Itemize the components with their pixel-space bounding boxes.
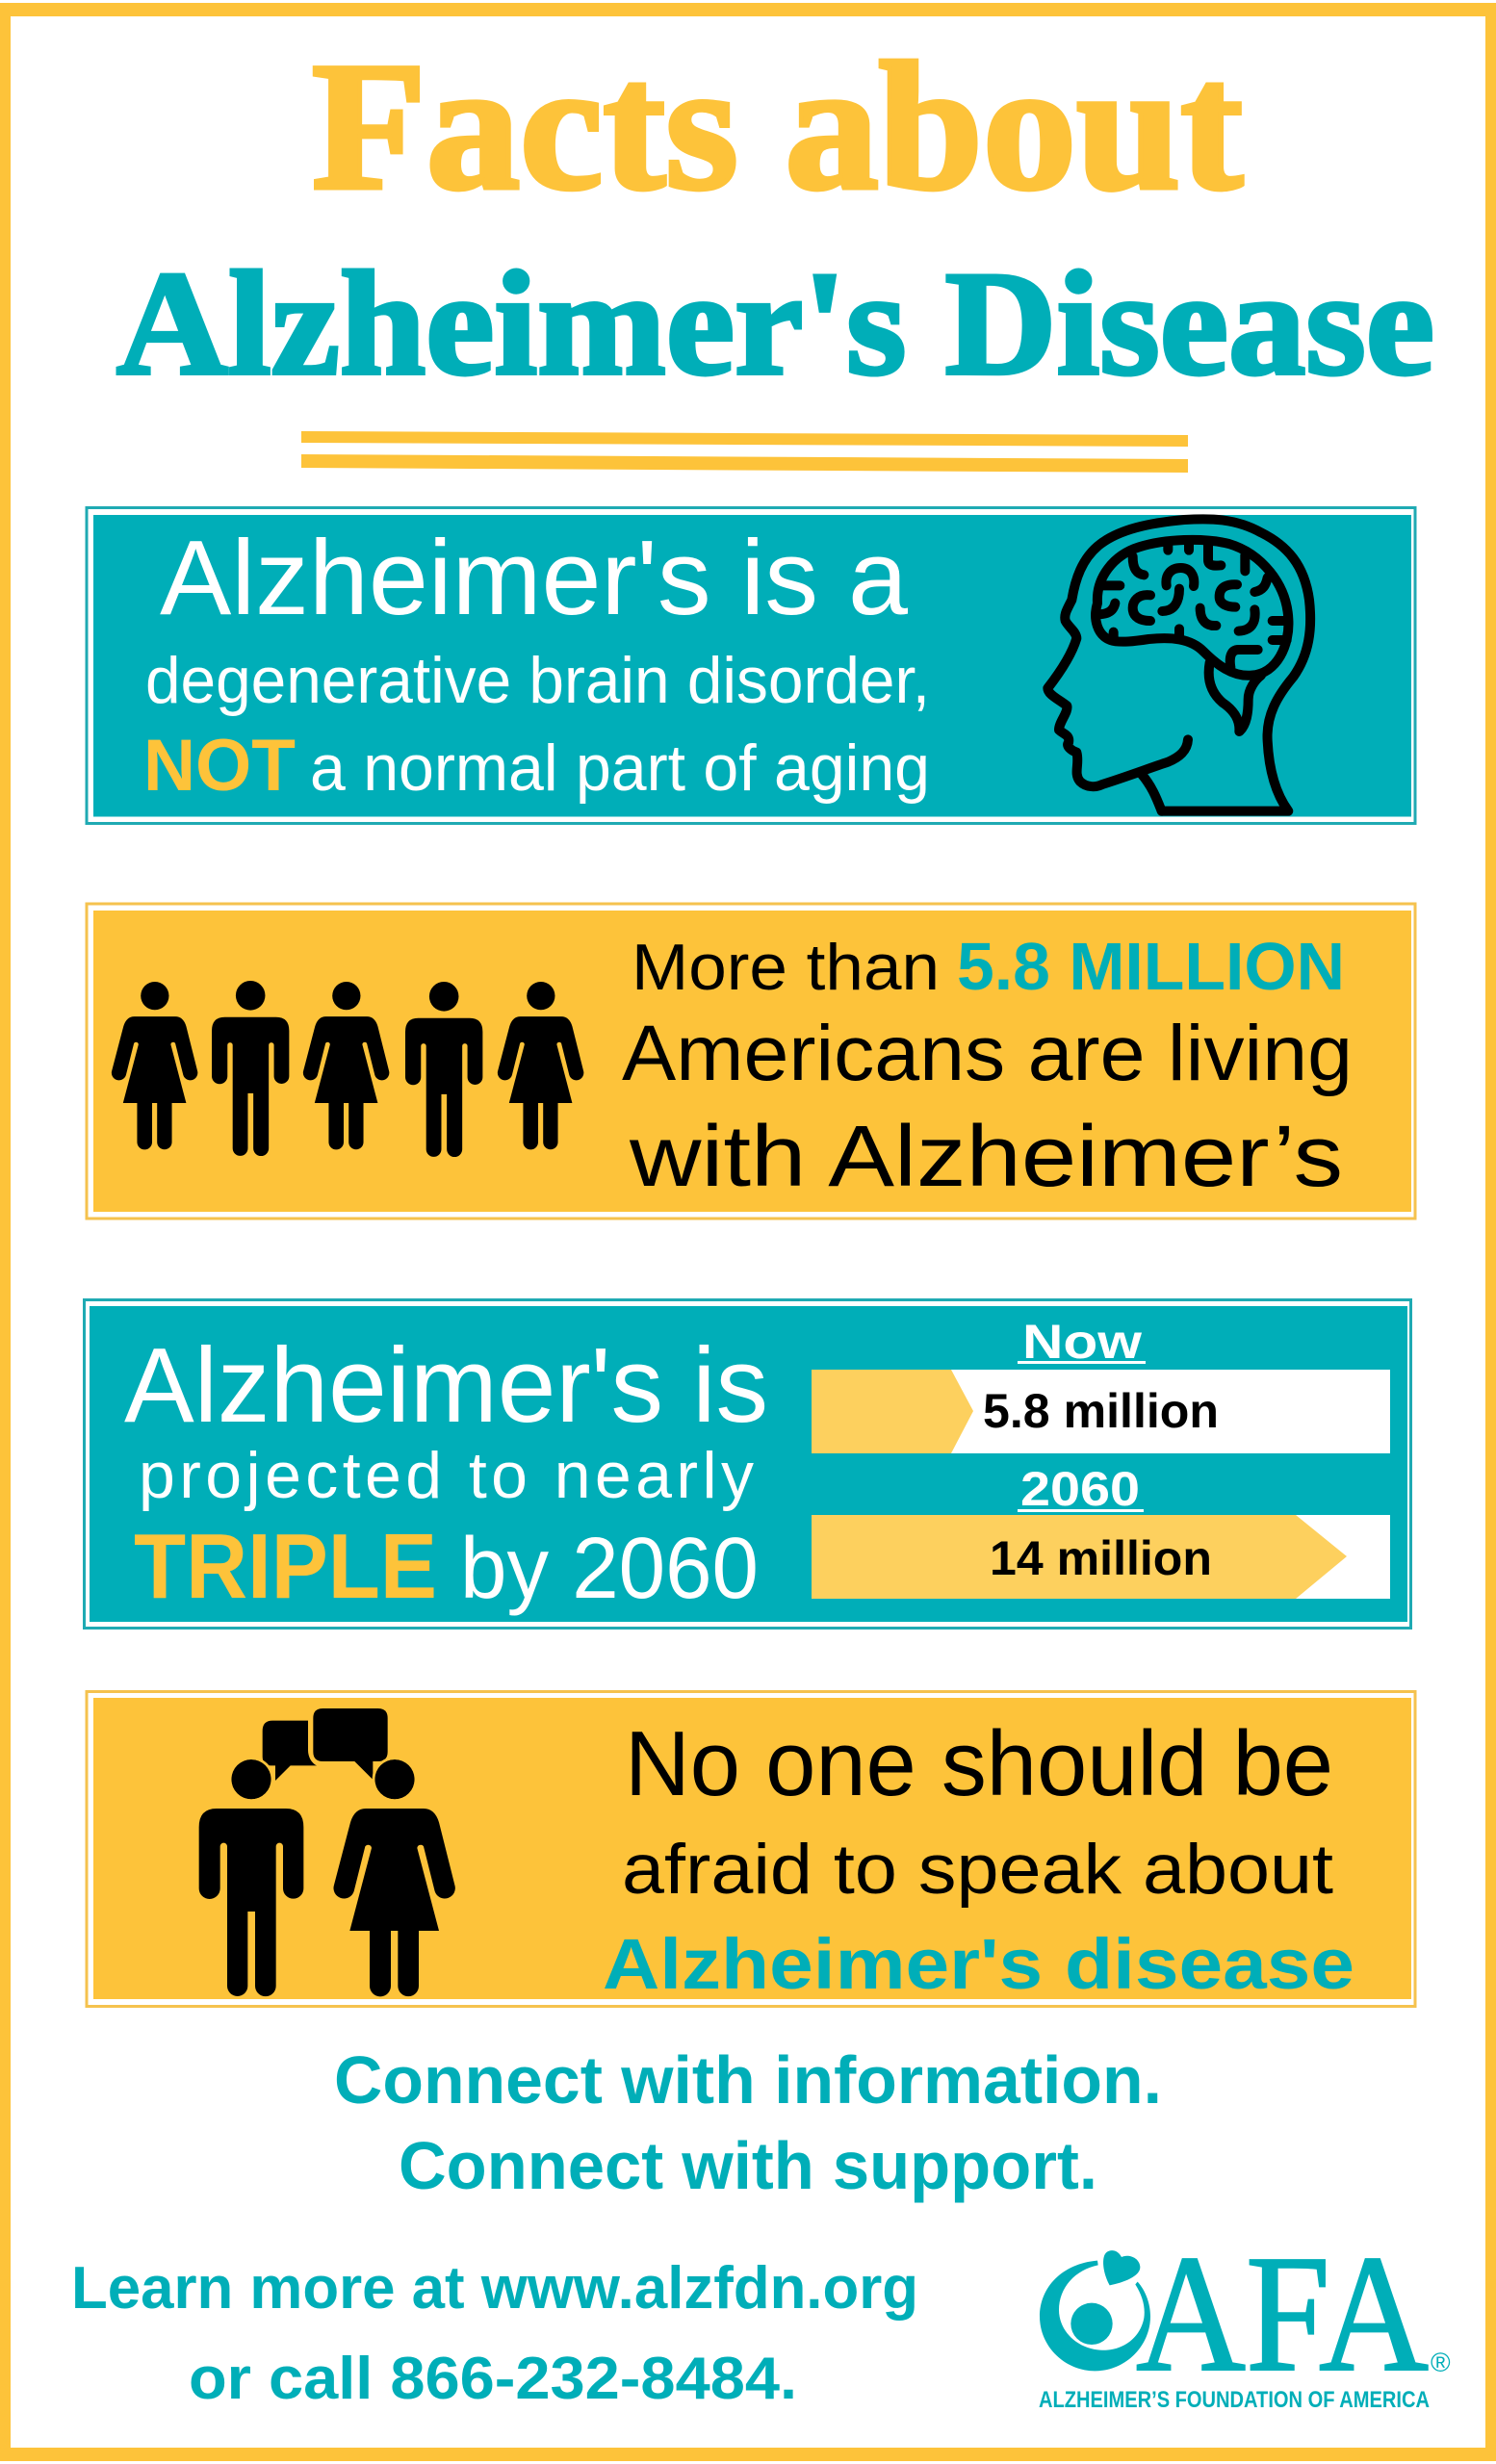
logo: Alzheimer's Foundation of America: AFA	[1136, 2220, 1429, 2406]
label: 2060: 2060	[1020, 1462, 1140, 1516]
panel text: with Alzheimer’s	[629, 1109, 1343, 1205]
bar: 5.8 million: 5.8 million	[983, 1384, 1219, 1438]
panel text: Alzheimer's disease	[603, 1924, 1354, 2004]
panel: no one should be afraid	[87, 1692, 1415, 2006]
tagline	[334, 2042, 1162, 2203]
icon: head with brain	[1047, 519, 1310, 811]
panel: projected to triple	[85, 1299, 1411, 1629]
panel text: Americans are living	[622, 1010, 1353, 1097]
title line: Alzheimer's Disease: Alzheimer's Disease	[116, 241, 1434, 406]
contact details: Learn more at www.alzfdn.org	[71, 2255, 918, 2322]
bar: 14 million: 14 million	[990, 1531, 1212, 1585]
icon: row of five people	[112, 981, 583, 1157]
contact details: or call 866-232-8484.	[189, 2346, 797, 2412]
panel text: Alzheimer's is a	[160, 519, 909, 637]
contact details	[71, 2255, 918, 2412]
tagline: Connect with information.	[334, 2042, 1162, 2118]
panel text: NOT	[143, 725, 296, 807]
bar: 5.8 million	[812, 1370, 1390, 1453]
label: Now: Now	[1022, 1315, 1142, 1369]
panel text: TRIPLE	[134, 1515, 437, 1618]
chart: now vs 2060 arrows	[812, 1315, 1390, 1599]
logo mark	[1040, 2250, 1150, 2371]
panel text: Alzheimer's is	[124, 1326, 768, 1445]
panel text: afraid to speak about	[622, 1831, 1333, 1909]
title double rule	[301, 431, 1188, 473]
panel: degenerative brain disorder	[87, 508, 1415, 824]
bar: 14 million	[812, 1515, 1390, 1599]
icon: two people talking	[199, 1708, 455, 1996]
panel text	[124, 1326, 768, 1618]
panel text: a normal part of aging	[310, 732, 930, 805]
panel text	[603, 1712, 1354, 2004]
title line: Facts about: Facts about	[312, 26, 1243, 228]
panel text: degenerative brain disorder,	[145, 644, 930, 717]
panel text	[143, 519, 930, 807]
panel text: projected to nearly	[139, 1439, 754, 1512]
panel text: More than	[632, 931, 940, 1004]
logo: Alzheimer's Foundation of America: ®	[1431, 2348, 1451, 2377]
title	[116, 26, 1434, 406]
tagline: Connect with support.	[399, 2128, 1097, 2203]
panel text: 5.8 MILLION	[957, 929, 1345, 1004]
panel text: No one should be	[625, 1712, 1333, 1815]
panel text	[622, 929, 1353, 1205]
panel: 5.8 million Americans	[87, 904, 1415, 1219]
logo: Alzheimer's Foundation of America: ALZHEIMER’S FOUNDATION OF AMERICA	[1039, 2387, 1430, 2413]
panel text: by 2060	[460, 1521, 759, 1617]
